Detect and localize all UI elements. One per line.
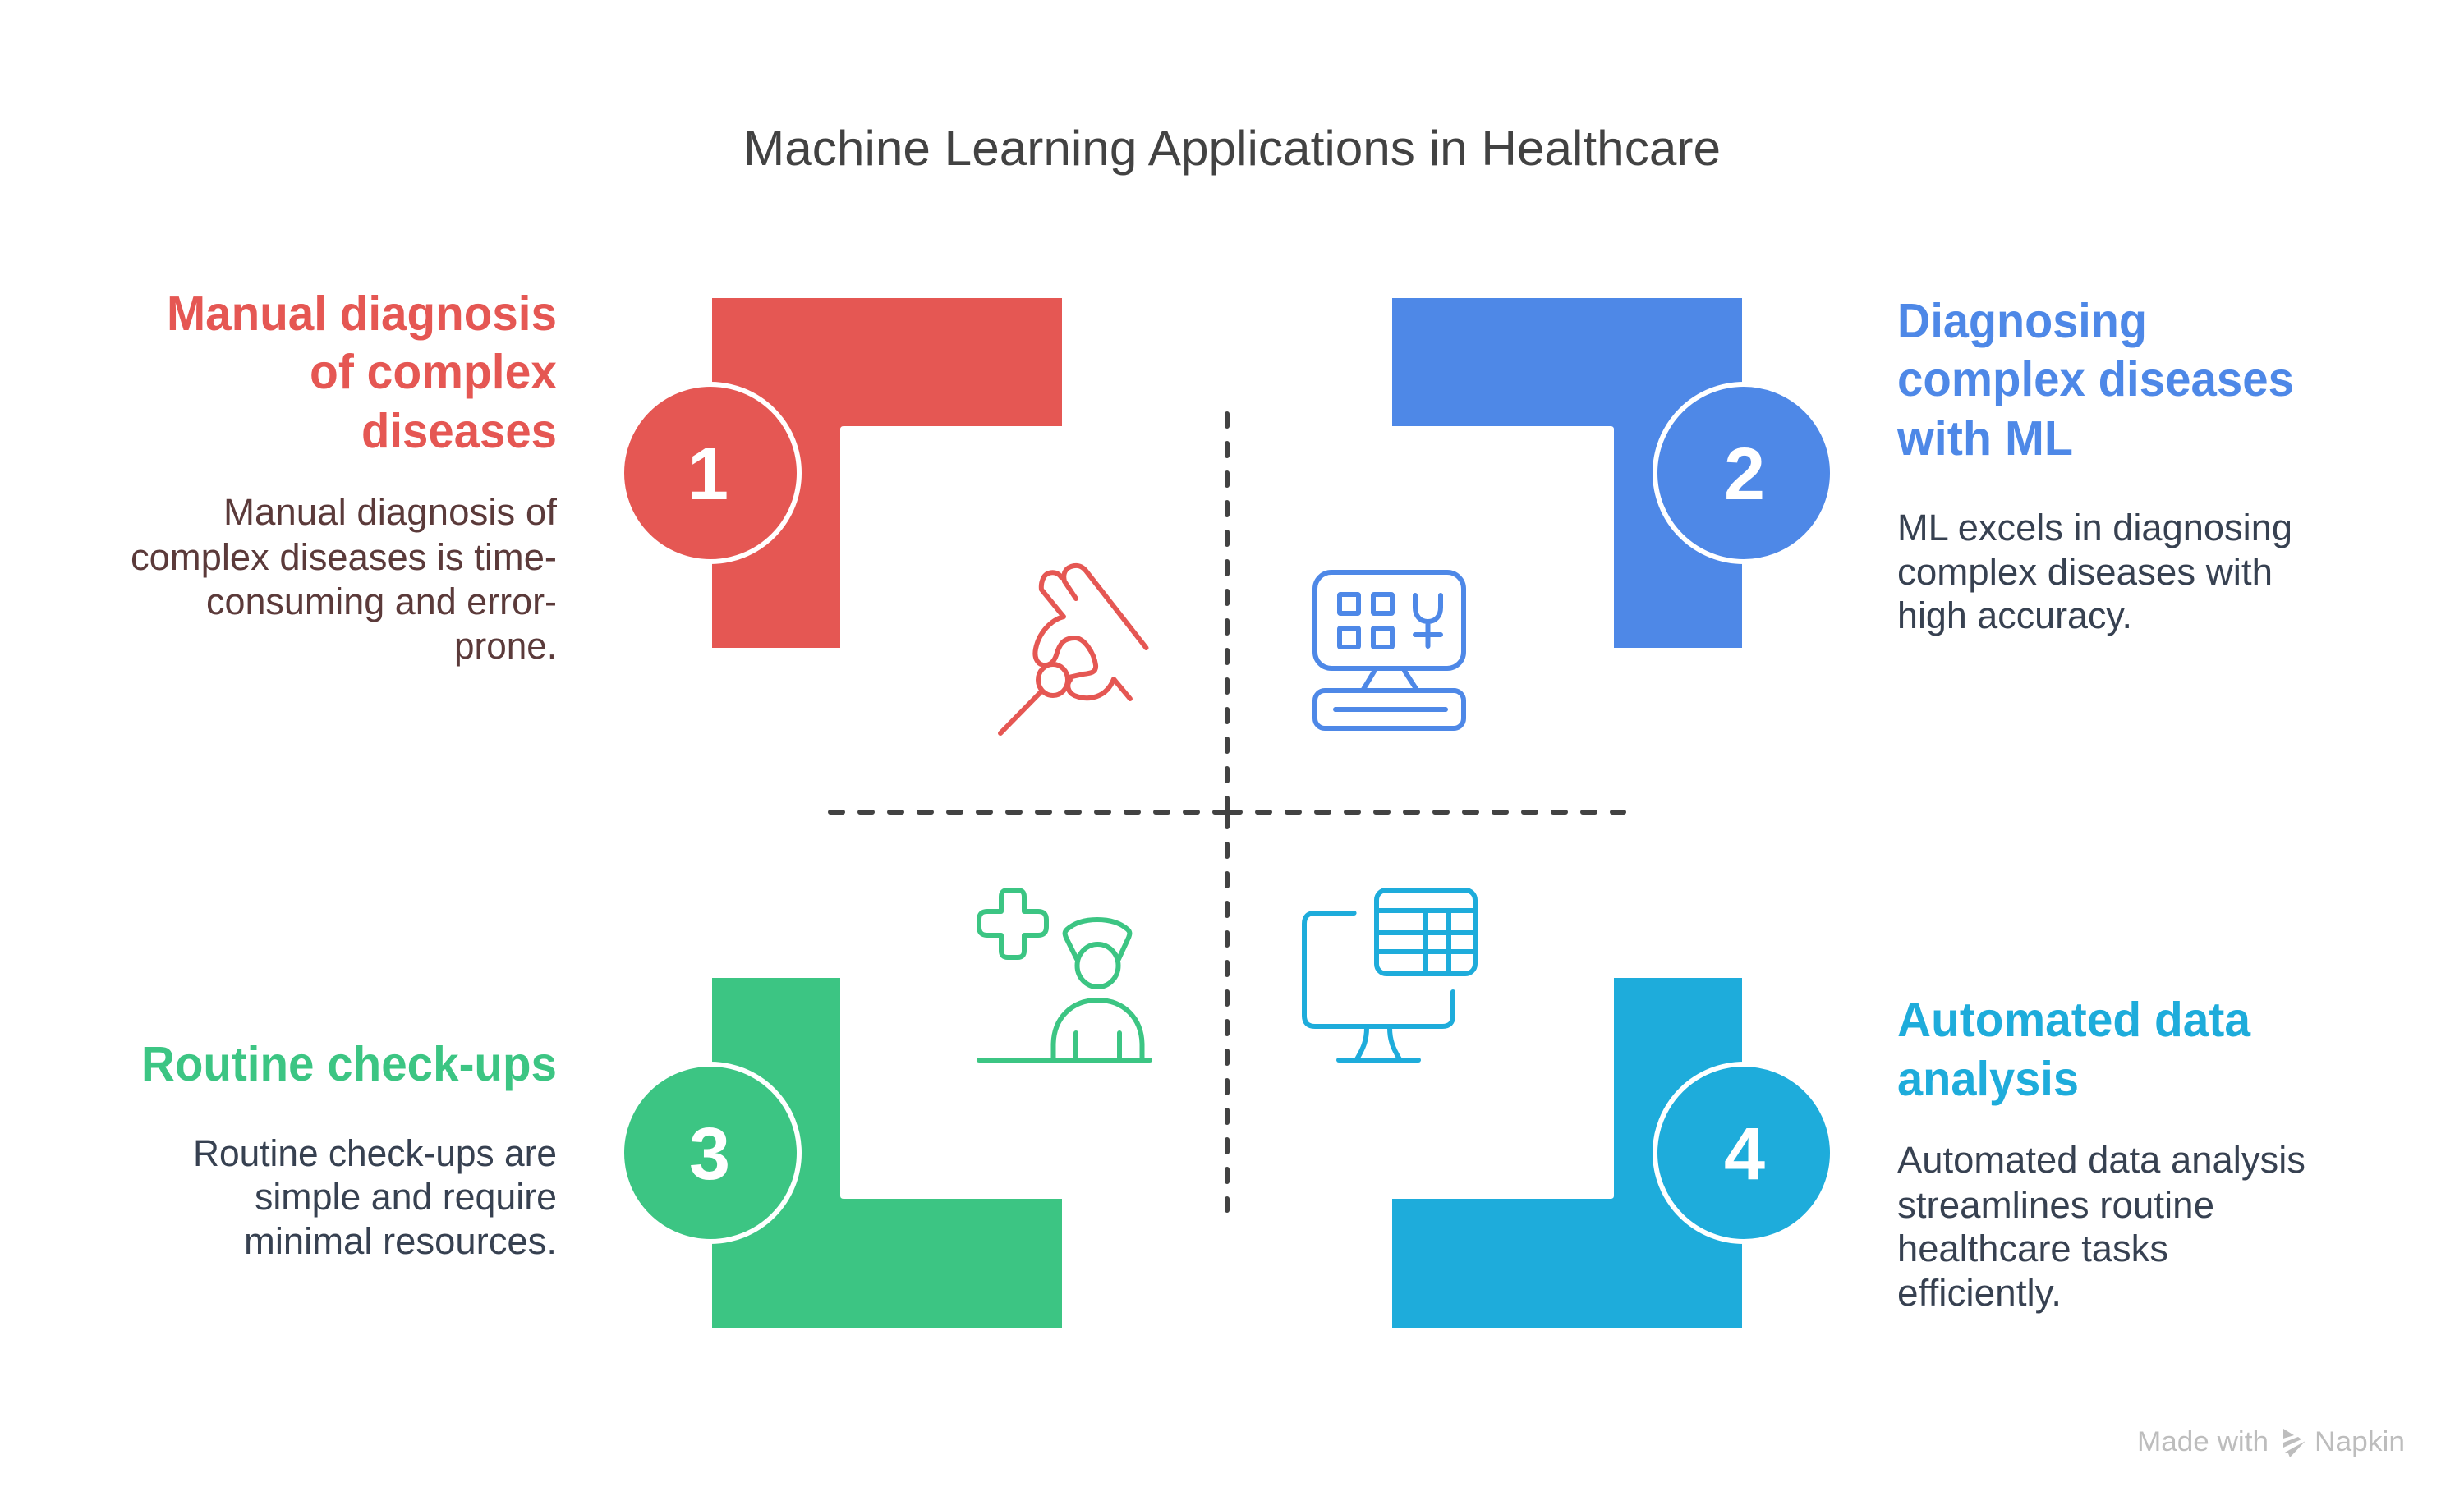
- heading: manual diagnosis: [167, 287, 557, 458]
- text: manual diagnosis description: [131, 491, 557, 667]
- text: automated data analysis description: streamlines routine: [1897, 1184, 2214, 1226]
- heading: diagnosing with ML: Diagnosing: [1897, 294, 2147, 348]
- badge 1: 1: [687, 434, 729, 516]
- icon: napkin logo: [2283, 1429, 2305, 1457]
- text: manual diagnosis description: complex diseases is time-: [131, 536, 557, 578]
- panel: manual diagnosis shape and badge: [622, 298, 1062, 648]
- badge 2: [1655, 384, 1832, 562]
- panel: automated data analysis shape and badge: [1392, 978, 1832, 1328]
- text: diagnosing with ML description: ML excels in diagnosing: [1897, 507, 2292, 548]
- text: diagnosing with ML description: complex diseases with: [1897, 551, 2273, 593]
- badge 3: 3: [689, 1113, 730, 1196]
- heading: manual diagnosis: diseases: [361, 404, 557, 458]
- text: automated data analysis description: [1897, 1139, 2305, 1314]
- panel: diagnosing with ML shape and badge: [1392, 298, 1832, 648]
- badge 1: [622, 384, 799, 562]
- icon: hand with swab: [1000, 566, 1147, 733]
- text: routine check-ups description: Routine check-ups are: [193, 1132, 557, 1174]
- heading: diagnosing with ML: [1896, 294, 2294, 466]
- watermark: made with napkin: Made with: [2137, 1426, 2269, 1457]
- icon: monitor with data table: [1304, 890, 1475, 1060]
- text: manual diagnosis description: consuming and error-: [206, 581, 557, 622]
- heading: diagnosing with ML: with ML: [1896, 411, 2073, 466]
- badge 4: [1655, 1064, 1832, 1242]
- text: routine check-ups description: minimal resources.: [244, 1220, 557, 1262]
- heading: routine check-ups: Routine check-ups: [141, 1037, 557, 1091]
- icon: diagnostic computer: [1315, 572, 1464, 728]
- heading: automated data analysis: analysis: [1897, 1052, 2079, 1106]
- heading: manual diagnosis: of complex: [310, 345, 557, 399]
- panel: routine check-ups shape and badge: [622, 978, 1062, 1328]
- watermark: made with napkin: [2137, 1426, 2405, 1457]
- watermark: made with napkin: Napkin: [2315, 1426, 2405, 1457]
- title: Machine Learning Applications in Healthcare: [743, 121, 1721, 176]
- badge 4: 4: [1724, 1113, 1765, 1196]
- badge 2: 2: [1724, 434, 1765, 516]
- heading: automated data analysis: [1897, 993, 2251, 1106]
- icon: nurse with medical cross: [979, 890, 1150, 1060]
- heading: diagnosing with ML: complex diseases: [1897, 352, 2294, 406]
- heading: automated data analysis: Automated data: [1897, 993, 2251, 1047]
- text: routine check-ups description: [193, 1132, 557, 1262]
- badge 3: [622, 1064, 799, 1242]
- text: manual diagnosis description: prone.: [454, 625, 557, 667]
- quadrant divider lines: [830, 414, 1624, 1210]
- text: automated data analysis description: healthcare tasks: [1897, 1228, 2168, 1269]
- text: manual diagnosis description: Manual diagnosis of: [223, 491, 557, 533]
- text: diagnosing with ML description: [1897, 507, 2292, 636]
- text: automated data analysis description: efficiently.: [1897, 1272, 2062, 1314]
- heading: manual diagnosis: Manual diagnosis: [167, 287, 557, 341]
- text: diagnosing with ML description: high accuracy.: [1897, 594, 2132, 636]
- text: automated data analysis description: Automated data analysis: [1897, 1139, 2305, 1181]
- text: routine check-ups description: simple and require: [255, 1176, 557, 1218]
